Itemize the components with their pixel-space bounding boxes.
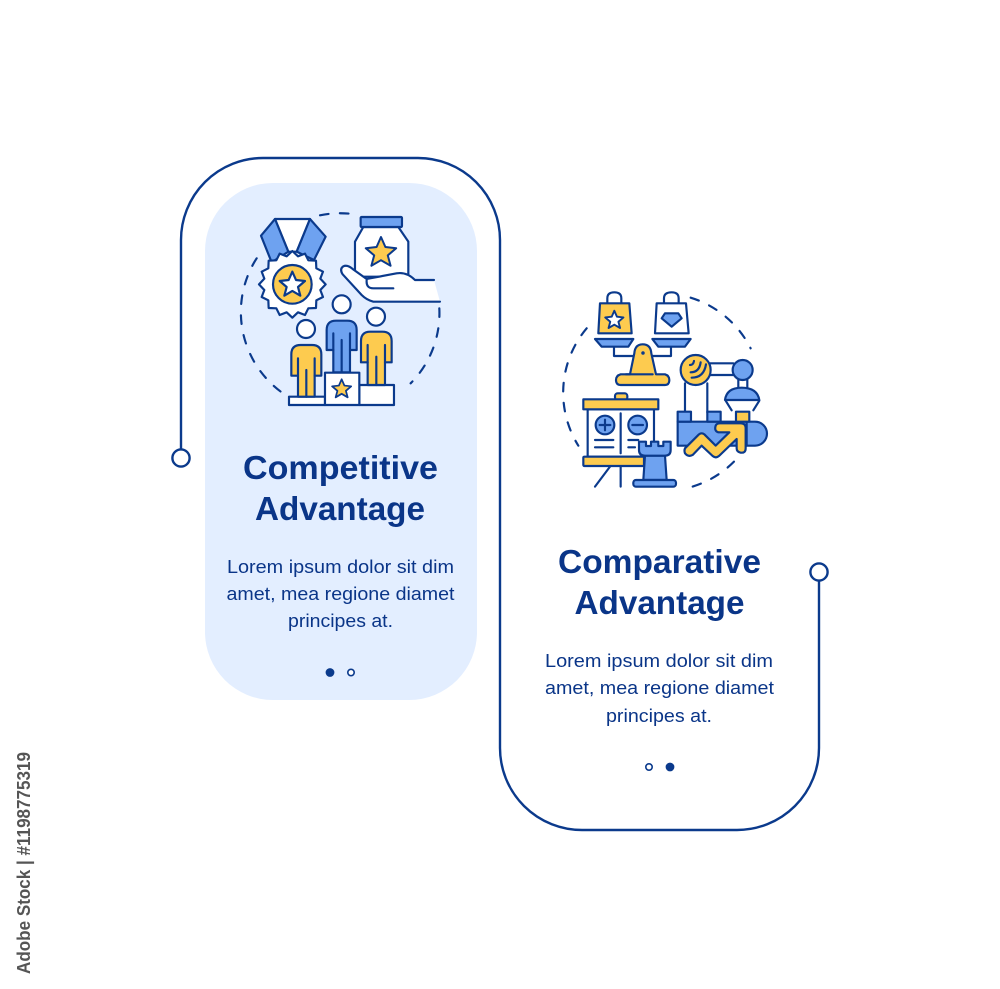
text: comparative description: amet, mea regione diamet	[545, 677, 774, 698]
shopping bags	[598, 292, 689, 333]
text: comparative description	[545, 650, 774, 726]
person: yellow right	[361, 308, 392, 385]
dashed circle	[241, 213, 439, 392]
text: comparative description: Lorem ipsum dolor sit dim	[545, 650, 773, 671]
chess rook	[633, 442, 676, 487]
icon: comparative advantage	[563, 292, 767, 489]
heading: competitive advantage: Competitive	[243, 449, 438, 486]
text: competitive description: Lorem ipsum dolor sit dim	[227, 556, 454, 577]
presentation board	[583, 393, 658, 487]
dashed circle	[563, 298, 751, 489]
hand	[341, 266, 440, 302]
conveyor with growth arrow	[678, 412, 767, 457]
text: competitive description: principes at.	[288, 610, 393, 631]
person: yellow left	[291, 320, 321, 397]
medal	[259, 219, 326, 318]
stock id caption: Adobe Stock | #1198775319	[14, 752, 34, 974]
person: blue	[327, 295, 357, 372]
icon: competitive advantage	[241, 213, 440, 405]
text: competitive description: amet, mea regione diamet	[226, 583, 454, 604]
text: competitive description	[226, 556, 454, 631]
jar with star	[355, 217, 408, 277]
balance scale	[595, 339, 691, 385]
pagination dots: right panel	[646, 763, 674, 771]
podium	[289, 373, 394, 405]
pagination dots: left panel	[326, 669, 354, 676]
robotic arm	[681, 355, 759, 412]
text: comparative description: principes at.	[606, 705, 712, 726]
connecting outline frame	[172, 158, 828, 830]
heading: comparative advantage: Comparative	[558, 543, 761, 580]
heading: competitive advantage	[243, 449, 438, 527]
panel: competitive advantage background	[205, 183, 477, 700]
heading: comparative advantage	[558, 543, 761, 621]
heading: competitive advantage: Advantage	[255, 490, 425, 527]
heading: comparative advantage: Advantage	[574, 584, 744, 621]
